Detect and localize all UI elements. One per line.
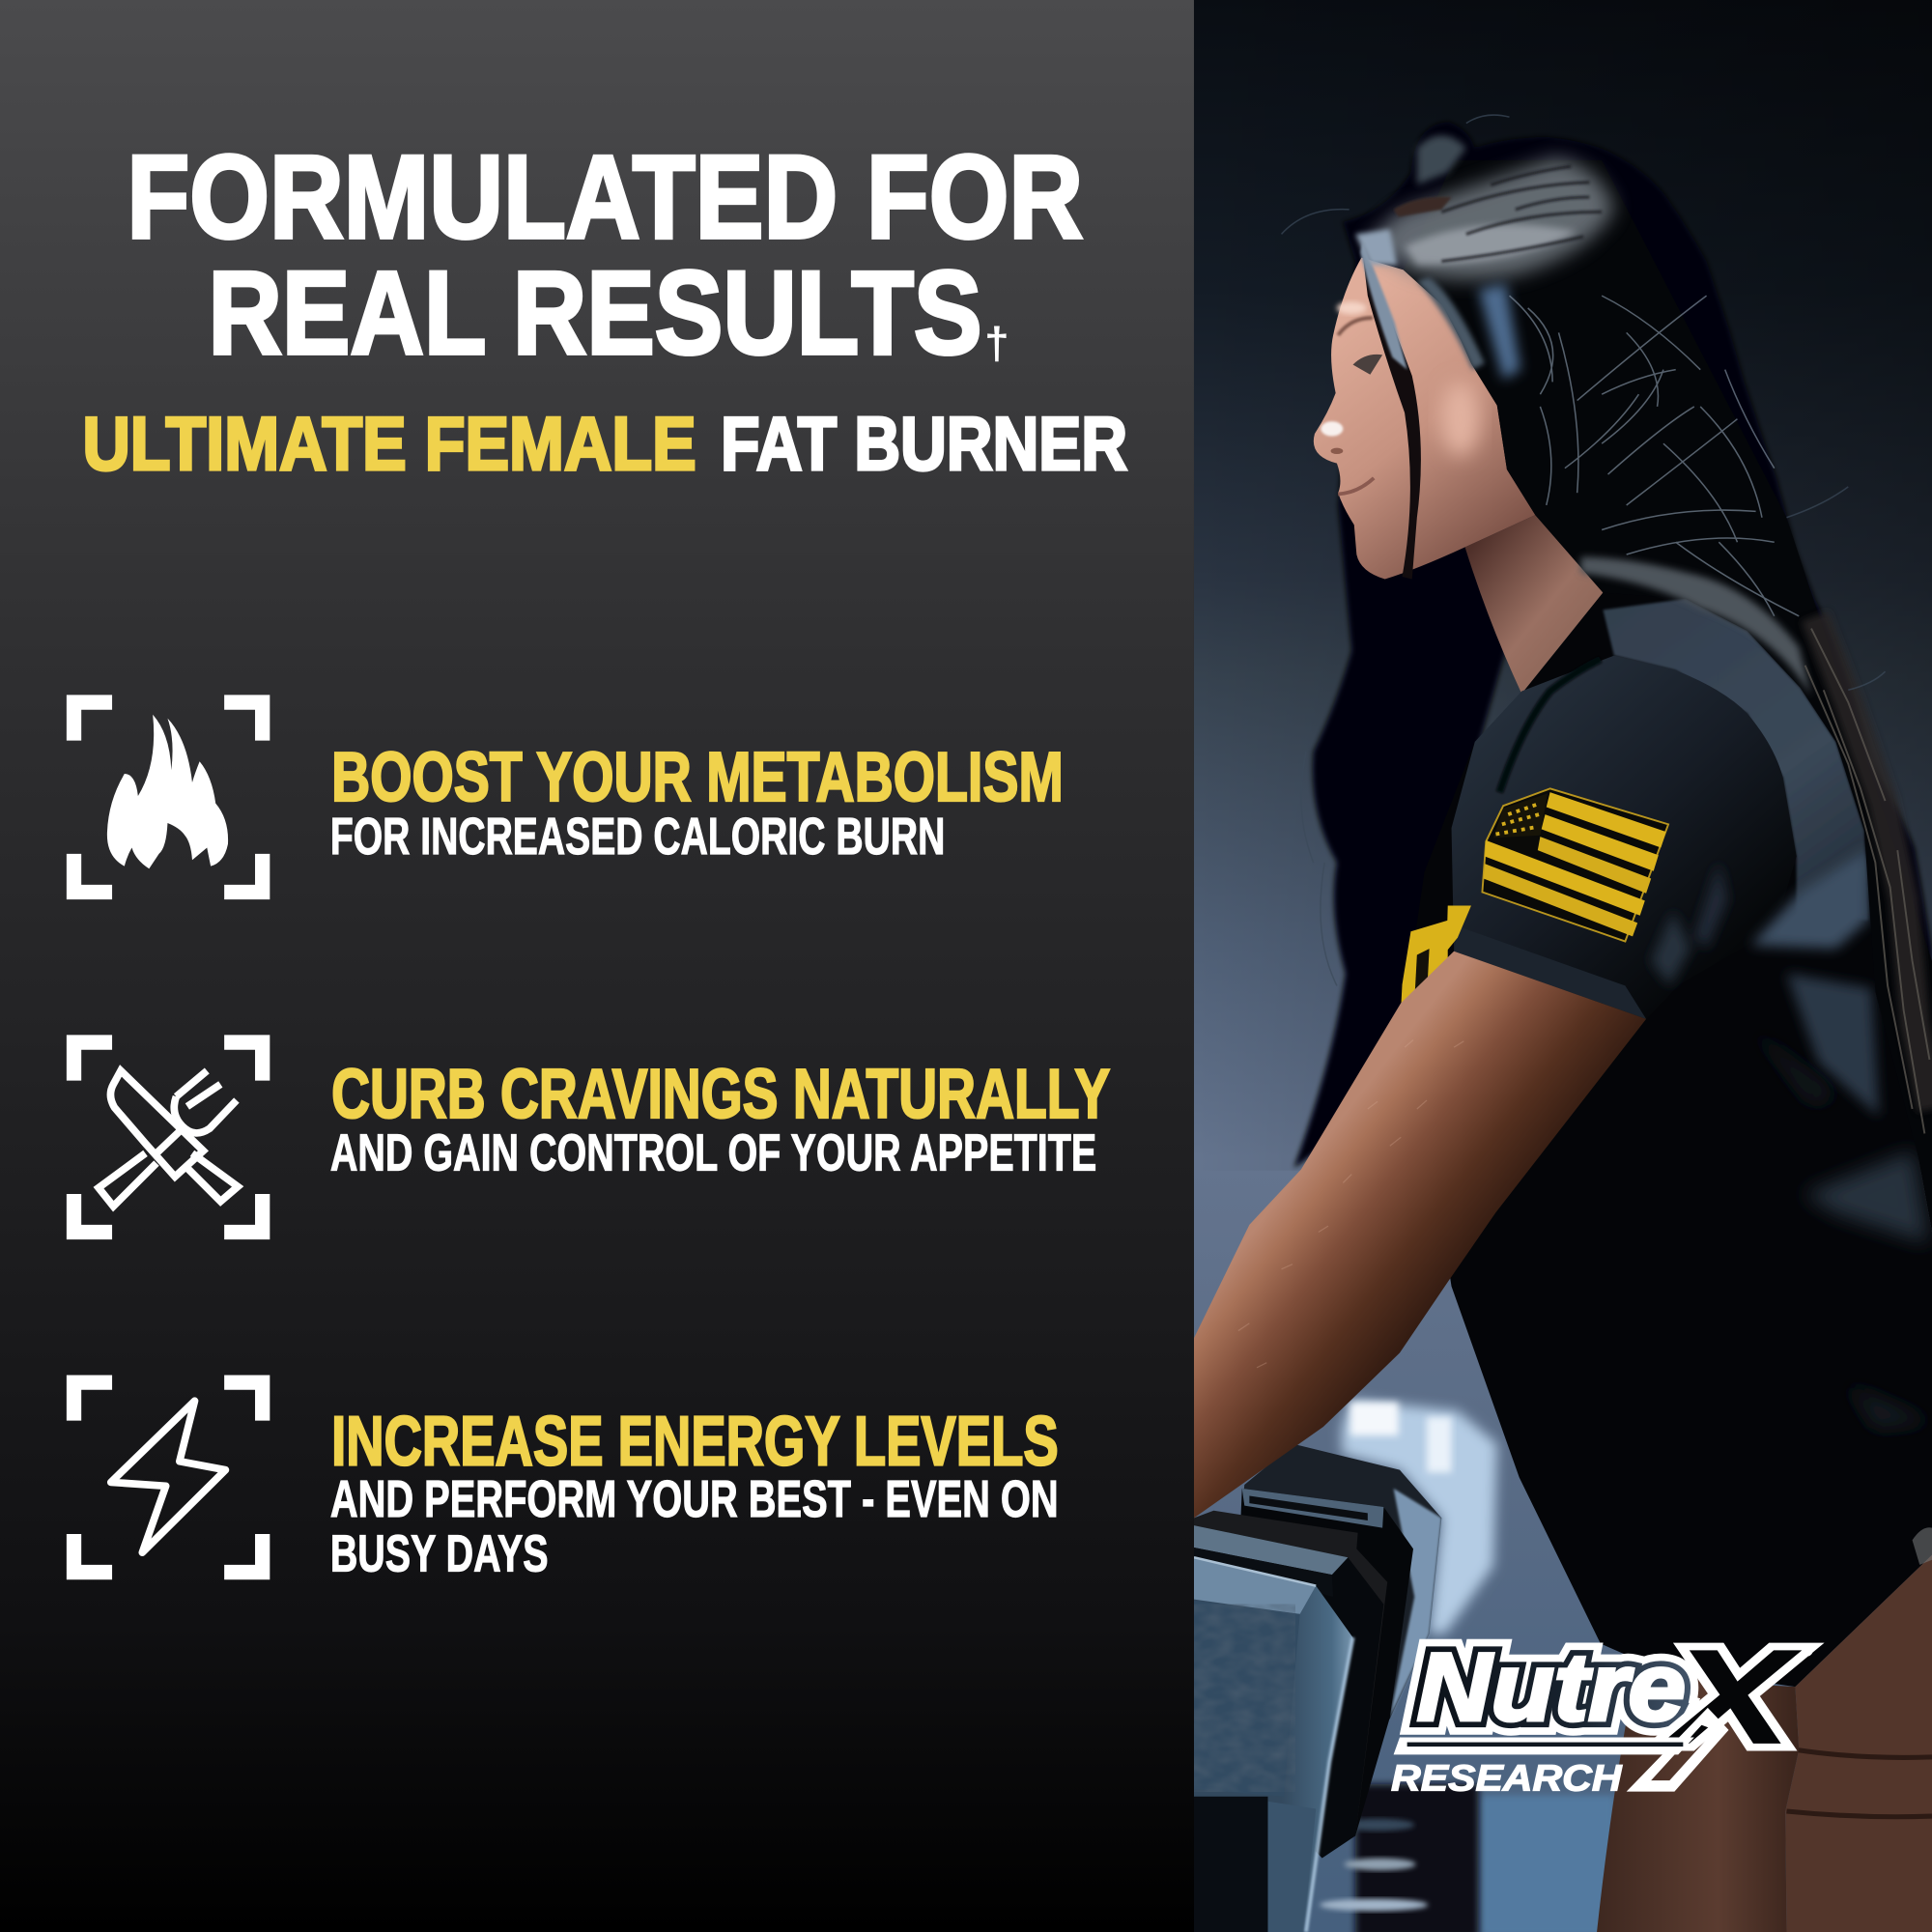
front head top plate <box>1194 1557 1316 1614</box>
hair: back and left silhouette <box>1293 122 1932 1189</box>
lips <box>1338 478 1374 494</box>
feature: boost metabolism <box>67 695 1064 899</box>
description: AND PERFORM YOUR BEST - EVEN ON <box>330 1470 1059 1528</box>
background right-side shade <box>1308 37 1932 1114</box>
dumbbell: second head <box>1194 1525 1383 1858</box>
stray hairs <box>1282 115 1886 985</box>
shirt shoulder highlight <box>1603 599 1868 921</box>
shorts waist fold <box>1786 1749 1932 1817</box>
hair: back braid texture <box>1805 629 1929 1133</box>
title line 1: FORMULATED FOR <box>127 130 1083 263</box>
logo X mark: X <box>1661 1621 1803 1773</box>
shirt front yellow print <box>1401 906 1471 1003</box>
logo wordmark letters: Nutre <box>1417 1634 1686 1742</box>
hair: sweep over shoulder <box>1580 557 1811 696</box>
dagger: † <box>984 318 1009 368</box>
front head edge glint <box>1306 1637 1353 1932</box>
heading: INCREASE ENERGY LEVELS <box>331 1403 1059 1481</box>
shirt body <box>1410 593 1932 1687</box>
subtitle yellow part: ULTIMATE FEMALE <box>82 403 696 486</box>
dumbbell: front head <box>1194 1557 1353 1932</box>
thigh <box>1597 1658 1799 1932</box>
shirt sleeve <box>1452 656 1797 1019</box>
logo X tail <box>1627 1708 1729 1792</box>
description: FOR INCREASED CALORIC BURN <box>330 808 945 866</box>
brow <box>1338 318 1373 335</box>
heading: CURB CRAVINGS NATURALLY <box>331 1055 1110 1133</box>
blurred bright dumbbell behind <box>1342 1400 1497 1634</box>
description <box>330 1470 1059 1582</box>
logo: Nutrex Research <box>1391 1621 1813 1799</box>
shorts <box>1785 1555 1932 1932</box>
shorts white print <box>1913 1527 1932 1565</box>
ear <box>1559 305 1585 354</box>
logo RESEARCH text: RESEARCH <box>1391 1757 1623 1799</box>
forearm <box>1194 952 1646 1518</box>
icon: flame in brackets <box>67 695 270 899</box>
feature: increase energy <box>67 1375 1059 1582</box>
sleeve lit collar edge <box>1499 659 1601 792</box>
hair: fine strands <box>1509 296 1799 616</box>
logo underline <box>1394 1737 1694 1754</box>
hair: front strand over cheek <box>1361 244 1421 579</box>
title line 2: REAL RESULTS <box>209 246 982 379</box>
dumbbell: third head <box>1194 1511 1387 1796</box>
front head bevel <box>1194 1586 1352 1922</box>
hair: dark streaks in sheen <box>1441 166 1602 261</box>
logo registered mark: ® <box>1802 1641 1813 1660</box>
description: AND GAIN CONTROL OF YOUR APPETITE <box>330 1124 1096 1182</box>
sleeve flag graphic <box>1482 788 1668 941</box>
heading: BOOST YOUR METABOLISM <box>331 738 1064 816</box>
hair: side over temple <box>1404 160 1932 1233</box>
blurred floor and rack background <box>1320 1784 1615 1932</box>
logo wordmark outer contour: Nutre <box>1417 1634 1686 1742</box>
dumbbell: fourth head <box>1233 1489 1413 1836</box>
icon: knife and fork in brackets <box>67 1035 270 1239</box>
subtitle white part: FAT BURNER <box>721 403 1127 486</box>
sleeve hem band <box>1463 938 1646 1019</box>
feature: curb cravings <box>67 1035 1110 1239</box>
nostril <box>1331 448 1343 454</box>
hair strand highlight top <box>1360 242 1407 370</box>
subtitle <box>82 403 1127 486</box>
dumbbell: fifth head <box>1244 1445 1441 1719</box>
neck <box>1465 515 1603 694</box>
logo underline inner rule <box>1407 1743 1683 1747</box>
sleeve back folds <box>1651 849 1879 1117</box>
cheek highlight <box>1440 382 1480 456</box>
icon: lightning bolt in brackets <box>67 1375 270 1579</box>
title <box>127 130 1083 379</box>
photo background <box>1194 0 1932 1932</box>
arm hair glints <box>1238 1040 1463 1368</box>
hair: back band tone <box>1815 616 1932 1109</box>
front head mottled face <box>1291 1613 1300 1655</box>
face <box>1314 258 1535 579</box>
eye <box>1353 355 1382 375</box>
hair: top sheen <box>1355 135 1614 380</box>
front head lower dark opening <box>1194 1797 1267 1932</box>
description: BUSY DAYS <box>330 1524 549 1582</box>
nose highlight <box>1321 421 1343 437</box>
logo wordmark inner band: Nutre <box>1417 1634 1686 1742</box>
panel: left dark gradient <box>0 0 1194 1932</box>
shirt lower folds <box>1780 1057 1932 1430</box>
brow highlight <box>1337 301 1367 314</box>
photo: woman at dumbbell rack <box>1194 0 1932 1932</box>
